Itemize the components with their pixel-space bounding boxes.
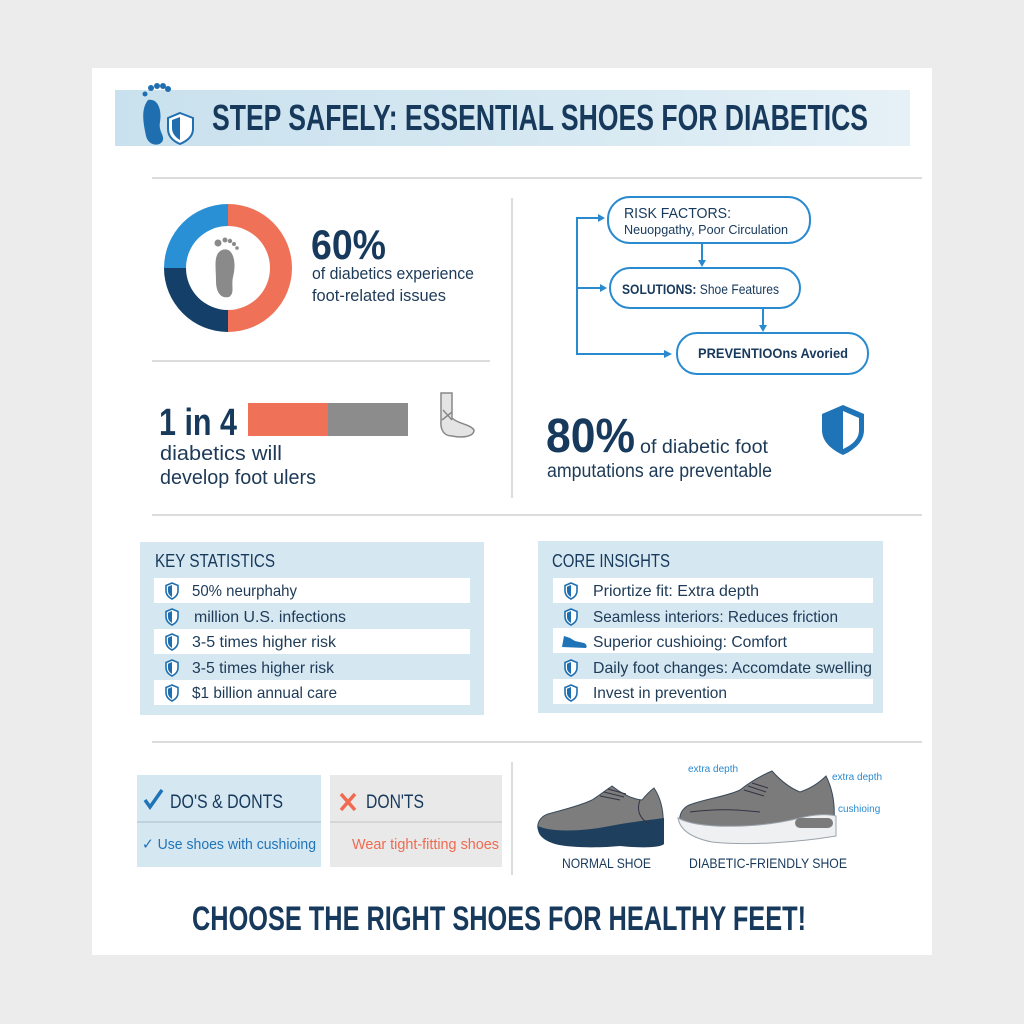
panel: donts: Wear tight-fitting shoes bbox=[352, 836, 499, 853]
illustration: diabetic-friendly shoe: DIABETIC-FRIENDLY SHOE bbox=[689, 855, 847, 871]
panel: dos bbox=[137, 775, 321, 867]
donut chart bbox=[164, 204, 292, 332]
panel: 80% stat: amputations are preventable bbox=[547, 461, 772, 482]
illustration: diabetic-friendly shoe: cushioing bbox=[838, 804, 880, 815]
panel: 1 in 4 stat bbox=[159, 393, 474, 489]
panel: 80% stat: of diabetic foot bbox=[640, 437, 769, 458]
panel: core insights: Invest in prevention bbox=[593, 685, 727, 702]
illustration: diabetic-friendly shoe bbox=[678, 764, 882, 871]
panel: key statistics: $1 billion annual care bbox=[192, 685, 337, 702]
icon: ankle bandage bbox=[441, 393, 474, 437]
panel: core insights bbox=[538, 541, 883, 713]
flowchart: RISK FACTORS: bbox=[624, 205, 731, 222]
panel: key statistics: 3-5 times higher risk bbox=[192, 634, 337, 651]
panel: core insights: Seamless interiors: Reduces friction bbox=[593, 609, 838, 626]
panel: dos: ✓ Use shoes with cushioing bbox=[142, 836, 316, 853]
flowchart: Neuopgathy, Poor Circulation bbox=[624, 222, 788, 237]
panel: dos: DO'S & DONTS bbox=[170, 792, 283, 813]
illustration: diabetic-friendly shoe: extra depth bbox=[832, 772, 882, 783]
panel: 60% donut stat bbox=[164, 204, 474, 332]
panel: key statistics: million U.S. infections bbox=[194, 609, 346, 626]
icon: foot with shield bbox=[142, 83, 193, 145]
icon: sneaker bbox=[562, 636, 587, 648]
panel: 1 in 4 stat: develop foot ulers bbox=[160, 467, 316, 489]
card background bbox=[92, 68, 932, 955]
flowchart bbox=[577, 197, 868, 374]
bar chart bbox=[248, 403, 408, 436]
panel: key statistics bbox=[140, 542, 484, 715]
panel: core insights: CORE INSIGHTS bbox=[552, 551, 670, 571]
title banner bbox=[115, 83, 910, 146]
panel: core insights: Priortize fit: Extra depth bbox=[593, 583, 759, 600]
icon: shield bbox=[822, 405, 864, 455]
panel: core insights: Daily foot changes: Accomdate swelling bbox=[593, 660, 872, 677]
panel: key statistics: 3-5 times higher risk bbox=[192, 660, 335, 677]
panel: key statistics: 50% neurphahy bbox=[192, 583, 297, 600]
icon: footprint bbox=[216, 249, 235, 297]
panel: 60% donut stat: 60% bbox=[311, 221, 386, 268]
panel: 60% donut stat: foot-related issues bbox=[312, 286, 446, 305]
illustration: normal shoe: NORMAL SHOE bbox=[562, 855, 651, 871]
flowchart: SOLUTIONS: Shoe Features bbox=[622, 281, 779, 297]
panel: 1 in 4 stat: 1 in 4 bbox=[159, 402, 237, 444]
flowchart: PREVENTIOOns Avoried bbox=[698, 345, 848, 361]
panel: donts bbox=[330, 775, 502, 867]
panel: 80% stat: 80% bbox=[546, 410, 635, 463]
panel: core insights: Superior cushioing: Comfort bbox=[593, 634, 788, 651]
panel: 1 in 4 stat: diabetics will bbox=[160, 443, 282, 465]
footer tagline: CHOOSE THE RIGHT SHOES FOR HEALTHY FEET! bbox=[192, 900, 806, 938]
illustration: diabetic-friendly shoe: extra depth bbox=[688, 764, 738, 775]
panel: key statistics: KEY STATISTICS bbox=[155, 551, 275, 571]
panel: donts: DON'TS bbox=[366, 792, 424, 813]
illustration: normal shoe bbox=[538, 786, 664, 871]
panel: 80% stat bbox=[546, 405, 864, 482]
panel: 60% donut stat: of diabetics experience bbox=[312, 264, 474, 283]
